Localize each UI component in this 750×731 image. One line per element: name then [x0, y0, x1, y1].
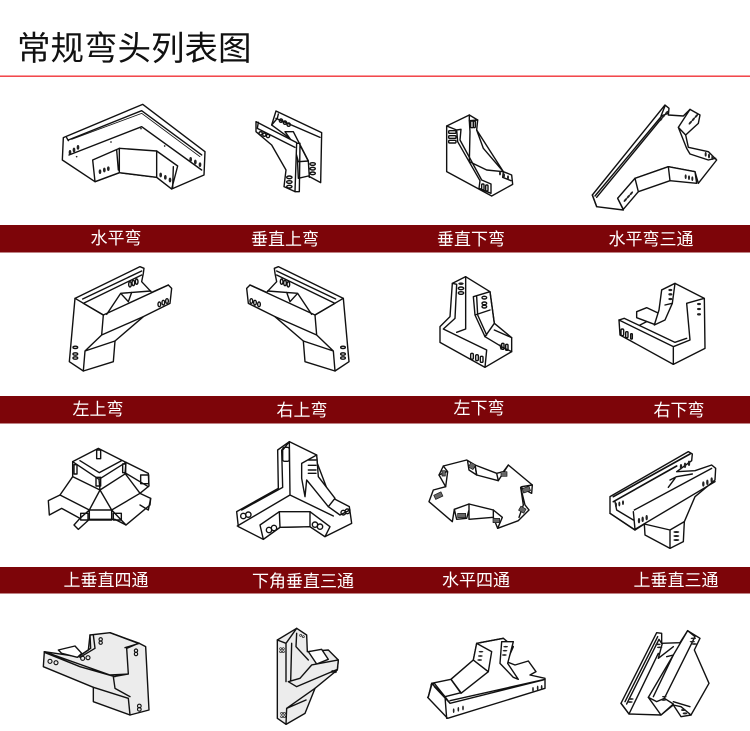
label band: row 3 [0, 567, 750, 594]
icon: 左下弯 [440, 277, 512, 367]
label band: row 2: 左下弯 [454, 399, 504, 418]
label band: row 2: 右下弯 [654, 401, 704, 420]
icon: 垂直下弯 [447, 115, 513, 196]
icon: 右上弯 [247, 267, 349, 371]
label band: row 3: 上垂直四通 [64, 571, 148, 590]
label band: row 2: 左上弯 [72, 400, 124, 419]
icon: 水平弯三通 [592, 105, 717, 210]
icon: 垂直上弯 [256, 111, 322, 192]
label band: row 3: 上垂直三通 [634, 571, 718, 590]
label band: row 1: 水平弯三通 [608, 230, 694, 249]
icon: 水平四通 [429, 460, 532, 528]
icon: 下角垂直三通 [237, 442, 352, 539]
label band: row 3: 水平四通 [442, 571, 510, 590]
label band: row 2: 右上弯 [276, 401, 328, 420]
label band: row 1: 水平弯 [90, 229, 142, 248]
icon: 底行左一弯通 [43, 633, 149, 715]
icon: 上垂直四通 [48, 448, 151, 529]
title underline [0, 76, 750, 77]
icon: 底行右二四通 [428, 638, 545, 718]
icon: 水平弯 [62, 104, 205, 189]
icon: 底行右一三通 [621, 631, 709, 717]
icon: 上垂直三通 [610, 452, 716, 548]
label band: row 1 [0, 225, 750, 252]
label band: row 1: 垂直上弯 [251, 230, 319, 249]
icon: 底行左二三通 [277, 628, 338, 724]
label band: row 3: 下角垂直三通 [252, 572, 354, 591]
title: 常规弯头列表图 [17, 31, 252, 68]
icon: 左上弯 [69, 267, 172, 371]
label band: row 2 [0, 396, 750, 424]
icon: 右下弯 [619, 283, 705, 364]
label band: row 1: 垂直下弯 [437, 230, 505, 249]
